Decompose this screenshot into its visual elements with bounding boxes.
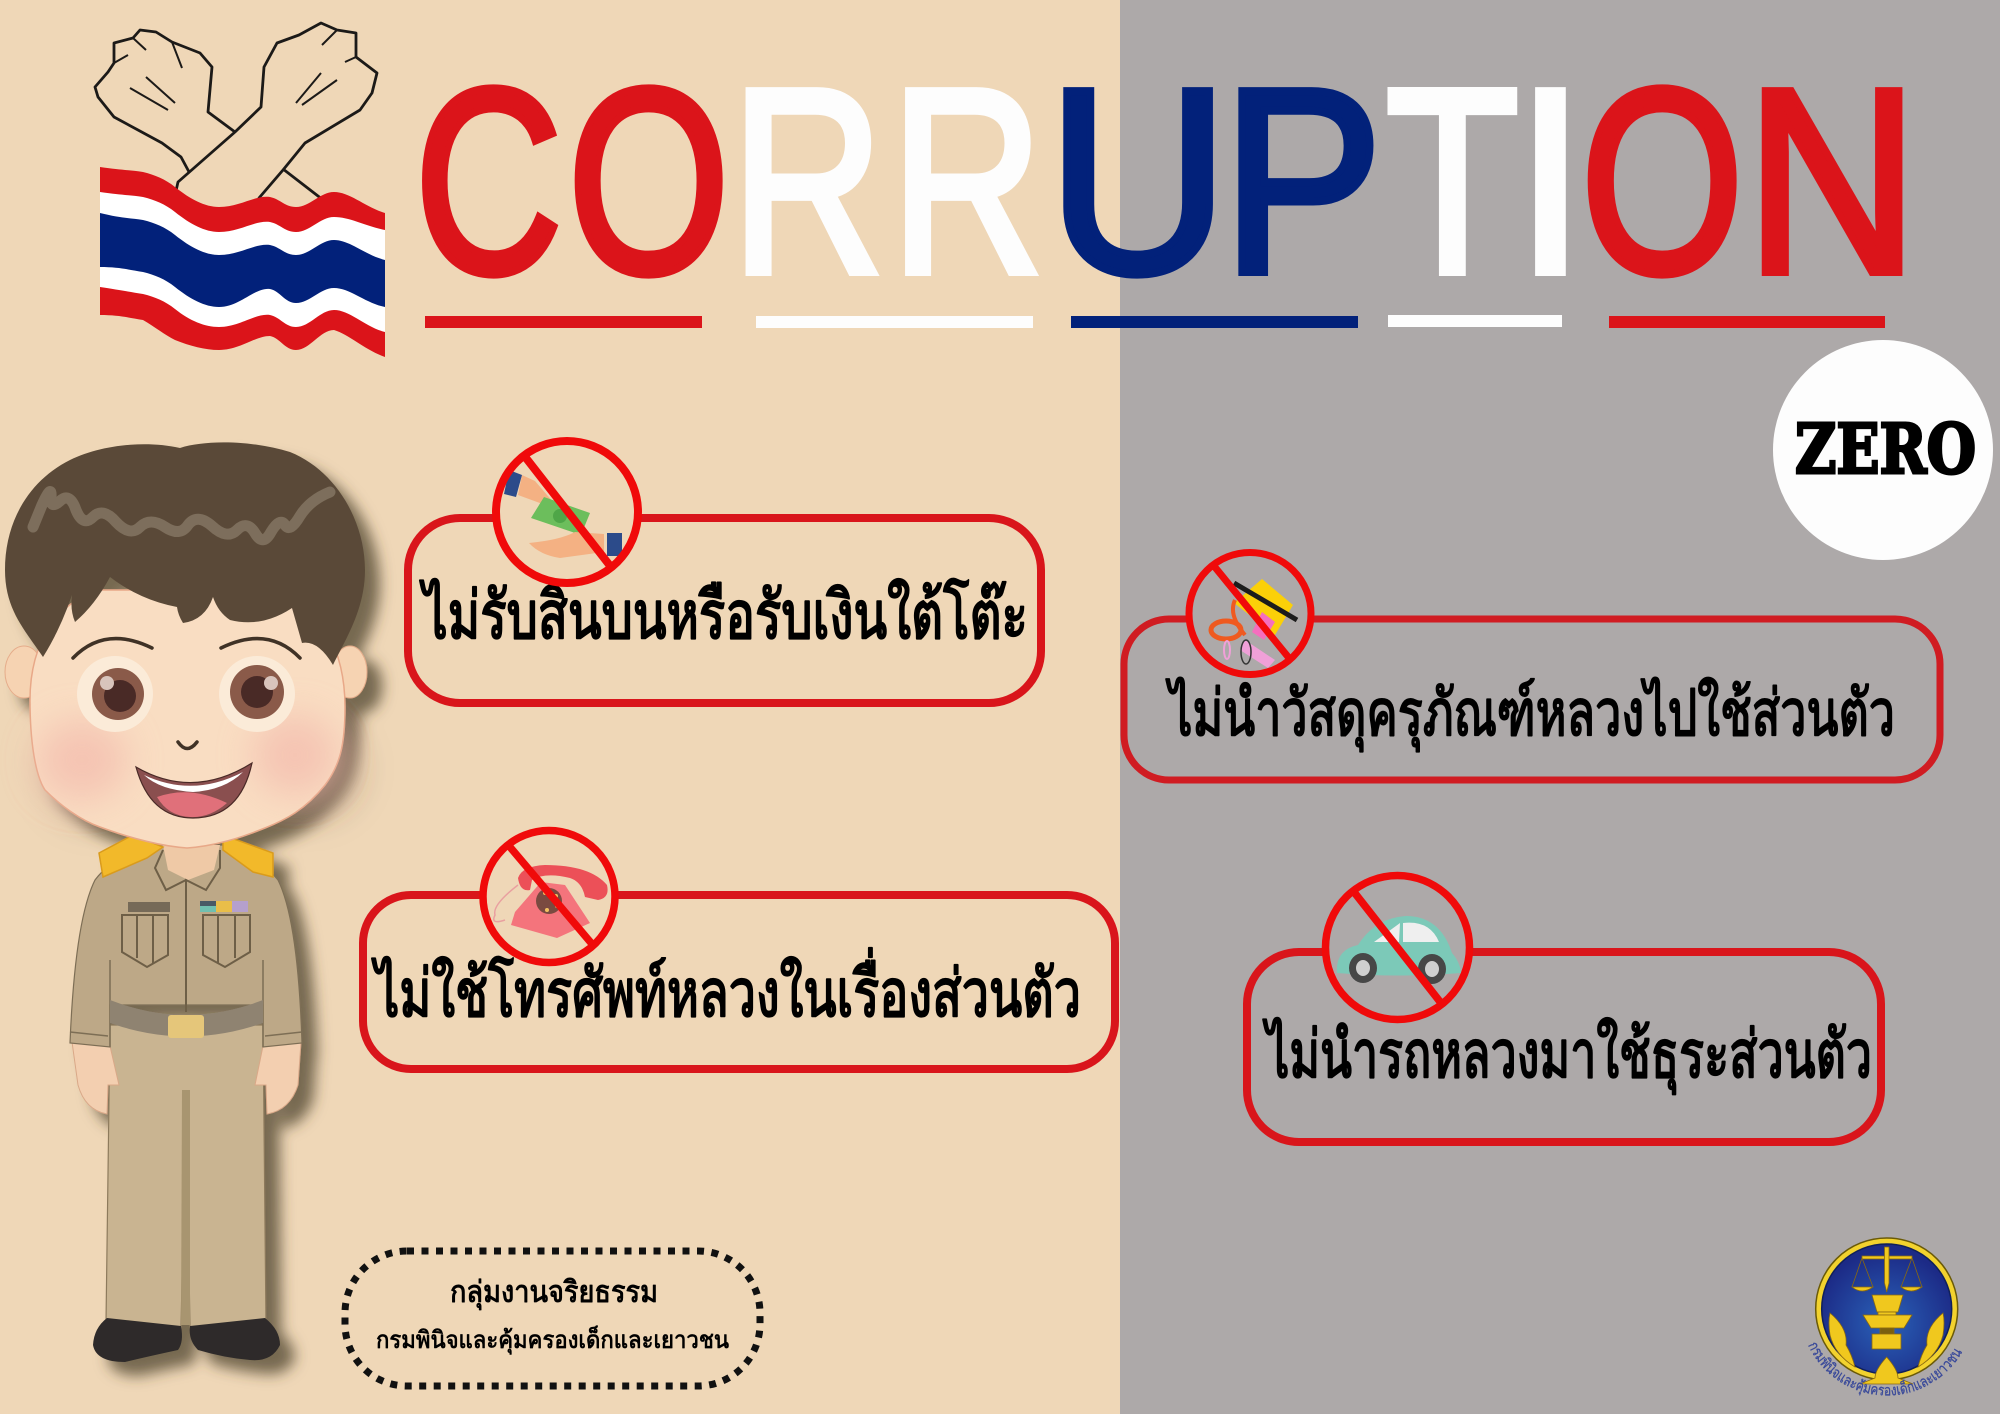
badge: ZERO	[1773, 340, 1993, 560]
illustration: smiling civil servant in khaki uniform	[5, 442, 367, 1362]
trouser crease shading	[181, 1090, 190, 1325]
neck and collar	[155, 845, 220, 890]
icon: teal car, prohibited	[1326, 876, 1470, 1020]
text: department name: กรมพินิจและคุ้มครองเด็กและเยาวชน	[376, 1325, 729, 1355]
cheeks	[37, 715, 337, 800]
ears	[5, 646, 367, 698]
icon: waving Thai flag	[100, 167, 385, 360]
shirt pockets, name plate and ribbons	[122, 870, 250, 1012]
icon: red telephone, prohibited	[483, 830, 615, 962]
shoes	[93, 1318, 280, 1362]
panel: no office supplies	[1124, 552, 1940, 780]
icon: crossed arms	[95, 23, 377, 240]
face	[30, 590, 345, 848]
title: CORRUPTION: R	[891, 35, 1043, 328]
title: CORRUPTION: U	[1048, 35, 1228, 328]
panel: left beige background	[0, 0, 1120, 1414]
belt and buckle	[110, 1000, 263, 1038]
title: CORRUPTION: O	[1581, 35, 1743, 328]
sleeve lines and cuffs	[70, 960, 302, 1047]
title: CORRUPTION: O	[568, 36, 729, 329]
logo: department seal	[1808, 1237, 1962, 1396]
credit box: ethics group	[345, 1251, 760, 1386]
logo curved text: กรมพินิจและคุ้มครองเด็กและเยาวชน	[1808, 1342, 1962, 1396]
epaulettes	[99, 835, 273, 877]
mouth	[136, 763, 252, 818]
title underlines	[425, 315, 1885, 328]
eyebrows, nose	[73, 639, 300, 748]
panel: no official car	[1247, 876, 1881, 1142]
title: CORRUPTION: R	[732, 35, 883, 328]
shirt	[70, 845, 302, 1047]
icon: stationery, prohibited	[1189, 552, 1311, 674]
hair highlight	[33, 492, 330, 540]
text: ethics work group: กลุ่มงานจริยธรรม	[450, 1276, 658, 1311]
title: CORRUPTION	[415, 34, 1918, 329]
title: CORRUPTION: T	[1386, 35, 1519, 329]
title: CORRUPTION: N	[1746, 35, 1918, 329]
icon: hands passing money, prohibited	[496, 441, 638, 583]
panel: right grey background	[1120, 0, 2000, 1414]
eyes	[77, 656, 295, 732]
hair	[5, 442, 365, 665]
hands	[72, 1042, 301, 1114]
text: no bribes: ไม่รับสินบนหรือรับเงินใต้โต๊ะ	[419, 578, 1028, 652]
panel: no bribes	[408, 441, 1041, 703]
title: CORRUPTION: I	[1516, 35, 1585, 329]
text: no office phone: ไม่ใช้โทรศัพท์หลวงในเรื่องส่วนตัว	[371, 948, 1081, 1030]
pants	[106, 1025, 266, 1328]
panel: no office phone	[363, 830, 1115, 1069]
title: CORRUPTION: P	[1222, 35, 1382, 328]
title: CORRUPTION: C	[415, 34, 562, 328]
